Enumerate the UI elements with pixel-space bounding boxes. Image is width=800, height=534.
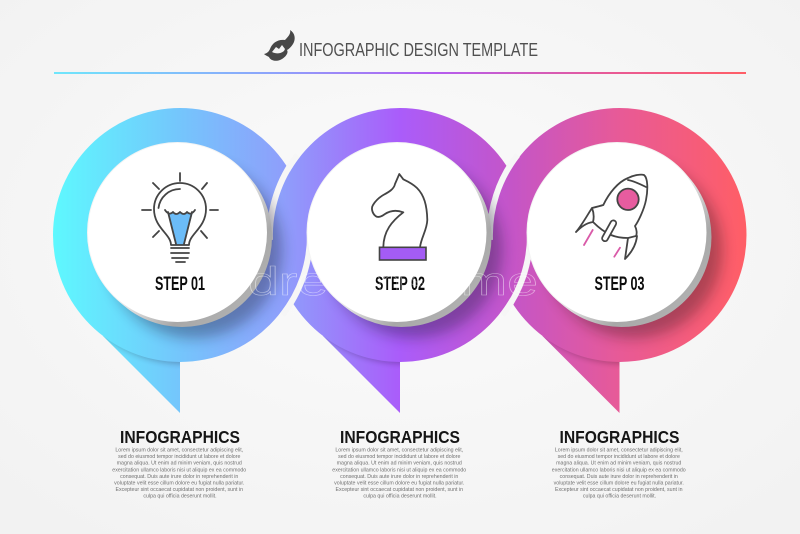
- body copy: sed do eiusmod tempor incididunt ut labore et dolore: [558, 454, 680, 460]
- body copy: Excepteur sint occaecat cupidatat non proident, sunt in: [115, 487, 243, 493]
- step 2 label: STEP 02: [375, 274, 425, 295]
- body copy: sed do eiusmod tempor incididunt ut labore et dolore: [338, 454, 460, 460]
- heading: INFOGRAPHICS: [120, 427, 240, 447]
- heading: INFOGRAPHICS: [560, 427, 680, 447]
- body copy: exercitation ullamco laboris nisi ut aliquip ex ea commodo: [552, 467, 686, 473]
- body copy: Lorem ipsum dolor sit amet, consectetur adipiscing elit,: [335, 448, 463, 454]
- body copy: consequat. Duis aute irure dolor in reprehenderit in: [340, 474, 458, 480]
- ribbon: three interlaced location-pin rings: [53, 108, 752, 413]
- text block: step 3: [552, 427, 687, 500]
- body copy: voluptate velit esse cillum dolore eu fugiat nulla pariatur.: [554, 480, 684, 486]
- panel: step 1: [87, 142, 272, 327]
- body copy: consequat. Duis aute irure dolor in reprehenderit in: [120, 474, 238, 480]
- icon: light bulb: [142, 173, 218, 262]
- body copy: magna aliqua. Ut enim ad minim veniam, quis nostrud: [556, 461, 681, 467]
- step 3 label: STEP 03: [594, 274, 644, 295]
- body copy: voluptate velit esse cillum dolore eu fugiat nulla pariatur.: [114, 480, 244, 486]
- infographic canvas: [53, 30, 746, 498]
- body copy: Lorem ipsum dolor sit amet, consectetur adipiscing elit,: [115, 448, 243, 454]
- watermark: dreamstime: [248, 260, 538, 304]
- body copy: voluptate velit esse cillum dolore eu fugiat nulla pariatur.: [334, 480, 464, 486]
- header logo: [264, 30, 295, 61]
- disk 2: [306, 142, 492, 327]
- body copy: exercitation ullamco laboris nisi ut aliquip ex ea commodo: [332, 467, 466, 473]
- icon: rocket: [576, 175, 647, 259]
- body copy: culpa qui officia deserunt mollit.: [143, 494, 217, 500]
- step 1 label: STEP 01: [155, 274, 205, 295]
- disk 1: [87, 142, 272, 327]
- body copy: Excepteur sint occaecat cupidatat non proident, sunt in: [335, 487, 463, 493]
- text block: step 2: [332, 427, 468, 500]
- icon: chess knight: [372, 174, 427, 260]
- panel: step 3: [526, 142, 712, 327]
- body copy: culpa qui officia deserunt mollit.: [583, 494, 656, 500]
- body copy: consequat. Duis aute irure dolor in reprehenderit in: [560, 474, 678, 480]
- body copy: exercitation ullamco laboris nisi ut aliquip ex ea commodo: [112, 467, 246, 473]
- disk 3: [526, 142, 712, 327]
- body copy: magna aliqua. Ut enim ad minim veniam, quis nostrud: [117, 461, 242, 467]
- body copy: magna aliqua. Ut enim ad minim veniam, quis nostrud: [337, 461, 462, 467]
- body copy: culpa qui officia deserunt mollit.: [363, 494, 437, 500]
- watermark: [248, 240, 538, 304]
- body copy: Excepteur sint occaecat cupidatat non proident, sunt in: [555, 487, 683, 493]
- title: INFOGRAPHIC DESIGN TEMPLATE: [299, 40, 538, 60]
- heading: INFOGRAPHICS: [340, 427, 460, 447]
- header gradient rule: [54, 72, 746, 74]
- text block: step 1: [112, 427, 248, 500]
- disk shadows on ribbon: [106, 162, 722, 338]
- body copy: Lorem ipsum dolor sit amet, consectetur adipiscing elit,: [555, 448, 683, 454]
- body copy: sed do eiusmod tempor incididunt ut labore et dolore: [118, 454, 240, 460]
- panel: step 2: [306, 142, 492, 327]
